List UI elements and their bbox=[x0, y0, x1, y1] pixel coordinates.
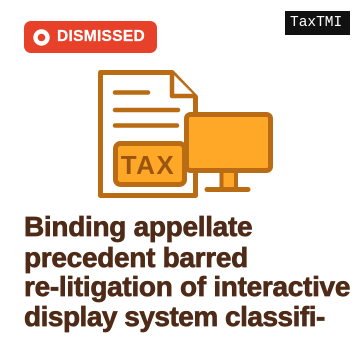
heading: re-litigation of interactive bbox=[24, 271, 350, 302]
icon: badge circle bbox=[33, 29, 50, 46]
logo: TaxTMI bbox=[285, 11, 350, 35]
badge: dismissed bbox=[24, 21, 157, 53]
badge label: DISMISSED bbox=[57, 28, 145, 45]
icon: tax label: TAX bbox=[121, 150, 175, 180]
heading: display system classifi- bbox=[24, 301, 325, 332]
icon: document bbox=[100, 72, 196, 196]
icon: monitor bbox=[186, 114, 270, 190]
logo: TaxTMI: TaxTMI bbox=[290, 15, 342, 31]
heading: Binding appellate bbox=[24, 211, 252, 242]
heading: precedent barred bbox=[24, 242, 248, 273]
heading bbox=[24, 211, 350, 332]
icon: tax label bbox=[116, 144, 184, 184]
